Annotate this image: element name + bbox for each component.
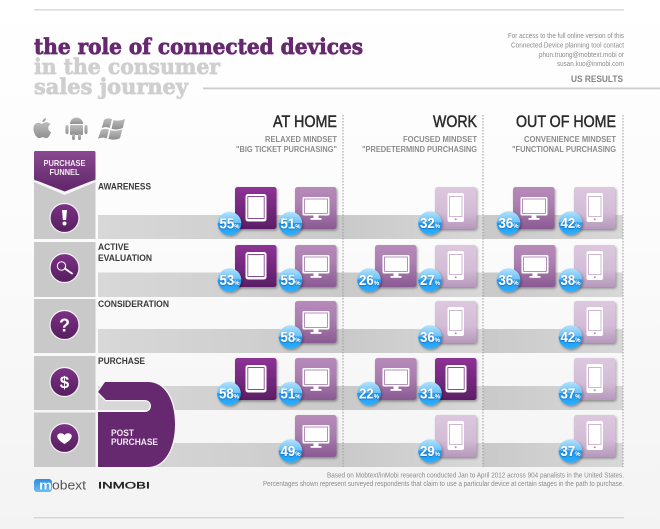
monitor work 26%: 26% bbox=[359, 273, 379, 289]
phone out of home 38% bbox=[559, 245, 616, 292]
monitor at home 58% bbox=[279, 301, 336, 349]
column header: work: FOCUSED MINDSET bbox=[403, 135, 477, 144]
funnel banner: FUNNEL bbox=[50, 167, 80, 177]
phone out of home 37%: 37% bbox=[560, 386, 581, 402]
footnote: Based on Mobtext/inMobi research conducted Jan to April 2012 across 904 panalists in the United States. bbox=[327, 472, 624, 480]
row: awareness bbox=[218, 187, 615, 235]
panel: funnel stage backgrounds bbox=[34, 180, 96, 467]
row: consideration bbox=[279, 301, 616, 349]
stage label: awareness: AWARENESS bbox=[98, 182, 151, 192]
monitor at home 49% bbox=[279, 415, 336, 463]
phone work 32% bbox=[418, 187, 476, 235]
stage label: consideration: CONSIDERATION bbox=[98, 299, 169, 310]
tablet work 31% bbox=[418, 358, 476, 405]
phone work 36%: 36% bbox=[420, 330, 440, 346]
title: the role of connected devices bbox=[34, 35, 363, 60]
monitor out of home 36%: 36% bbox=[498, 216, 519, 232]
contact text: susan.kuo@inmobi.com bbox=[557, 61, 624, 68]
icon: consideration question bbox=[50, 310, 79, 340]
phone work 36% bbox=[418, 301, 476, 349]
icon: apple bbox=[33, 118, 51, 138]
phone out of home 42% bbox=[559, 301, 616, 349]
footnote bbox=[263, 472, 624, 488]
icon: windows bbox=[98, 118, 125, 140]
icon: awareness exclamation bbox=[50, 204, 79, 232]
phone out of home 42% bbox=[559, 187, 616, 235]
post purchase arrow: POST bbox=[111, 428, 134, 439]
column header: out of home bbox=[512, 112, 616, 154]
contact text: For access to the full online version of this bbox=[508, 33, 624, 40]
logo: mobext bbox=[34, 478, 86, 492]
phone out of home 37% bbox=[559, 358, 616, 405]
header rule bbox=[203, 88, 660, 89]
column header: out of home: "FUNCTIONAL PURCHASING bbox=[512, 145, 616, 154]
monitor at home 55%: 55% bbox=[280, 273, 301, 289]
contact text: Connected Device planning tool contact bbox=[511, 42, 624, 50]
column header: work bbox=[362, 112, 478, 154]
tablet at home 53%: 53% bbox=[220, 273, 240, 289]
icon: purchase dollar: $ bbox=[60, 373, 70, 392]
phone out of home 37%: 37% bbox=[560, 444, 581, 460]
tablet at home 58%: 58% bbox=[219, 386, 239, 402]
funnel column bbox=[34, 151, 96, 467]
tablet at home 53% bbox=[218, 245, 276, 292]
column header: at home: "BIG TICKET PURCHASING" bbox=[236, 145, 337, 154]
monitor out of home 36% bbox=[497, 245, 556, 292]
stage label: active evaluation: ACTIVE bbox=[98, 242, 129, 253]
icon: purchase dollar bbox=[50, 368, 79, 396]
column header: work: "PREDETERMIND PURCHASING bbox=[362, 145, 477, 154]
phone out of home 42%: 42% bbox=[560, 330, 581, 346]
phone work 29% bbox=[418, 415, 476, 463]
post purchase arrow bbox=[98, 382, 175, 467]
phone work 27%: 27% bbox=[420, 273, 440, 289]
phone work 32%: 32% bbox=[420, 216, 440, 232]
bottom rule bbox=[34, 517, 624, 518]
icon: consideration question: ? bbox=[59, 316, 70, 336]
stage label: active evaluation: EVALUATION bbox=[98, 253, 152, 264]
monitor work 22%: 22% bbox=[359, 386, 379, 402]
row bands bbox=[98, 215, 623, 467]
column header: at home bbox=[236, 112, 337, 154]
contact text bbox=[508, 33, 625, 68]
column header: at home: AT HOME bbox=[273, 112, 337, 131]
monitor at home 51%: 51% bbox=[280, 216, 301, 232]
logo: mobext: obext bbox=[52, 478, 86, 492]
monitor out of home 36% bbox=[497, 187, 554, 235]
icon: evaluation magnifier bbox=[50, 254, 79, 282]
phone work 29%: 29% bbox=[420, 444, 440, 460]
row: purchase bbox=[217, 358, 615, 405]
monitor out of home 36%: 36% bbox=[498, 273, 519, 289]
stage label: purchase: PURCHASE bbox=[98, 356, 145, 367]
title: sales journey bbox=[34, 75, 188, 100]
monitor work 26% bbox=[357, 245, 416, 292]
footnote: Percentages shown represent surveyed respondents that claim to use a particular device at certain stages in the path to purchase. bbox=[263, 481, 624, 488]
column header: out of home: OUT OF HOME bbox=[516, 112, 616, 131]
logo: mobext: m bbox=[39, 478, 52, 492]
monitor at home 58%: 58% bbox=[280, 330, 301, 346]
monitor at home 51%: 51% bbox=[280, 386, 301, 402]
phone out of home 38%: 38% bbox=[560, 273, 581, 289]
icon: android bbox=[66, 118, 88, 140]
funnel banner: PURCHASE bbox=[44, 158, 86, 168]
icon: post purchase heart bbox=[50, 424, 79, 452]
phone out of home 37% bbox=[559, 415, 616, 463]
tablet at home 55%: 55% bbox=[220, 216, 240, 232]
tablet at home 58% bbox=[217, 358, 276, 405]
logo: inmobi: INMOBI bbox=[98, 480, 150, 492]
monitor at home 49%: 49% bbox=[280, 444, 301, 460]
contact text: phun.truong@mobtext.mobi or bbox=[539, 52, 625, 59]
tablet at home 55% bbox=[218, 187, 276, 235]
phone out of home 42%: 42% bbox=[560, 216, 581, 232]
column dividers bbox=[343, 115, 623, 467]
post purchase arrow: PURCHASE bbox=[111, 437, 158, 448]
top rule bbox=[34, 9, 624, 11]
column header: at home: RELAXED MINDSET bbox=[265, 135, 337, 144]
stage label: active evaluation bbox=[98, 242, 152, 264]
column header: out of home: CONVENIENCE MINDSET bbox=[524, 135, 616, 144]
title bbox=[34, 35, 363, 100]
monitor at home 51% bbox=[279, 358, 336, 405]
monitor at home 51% bbox=[279, 187, 336, 235]
monitor work 22% bbox=[357, 358, 416, 405]
column header: work: WORK bbox=[433, 112, 478, 131]
monitor at home 55% bbox=[279, 245, 336, 292]
US results label: US RESULTS bbox=[571, 74, 623, 84]
title: in the consumer bbox=[34, 55, 221, 80]
phone work 27% bbox=[418, 245, 476, 292]
funnel banner bbox=[34, 151, 96, 195]
row: active evaluation bbox=[218, 245, 615, 292]
row: post purchase bbox=[279, 415, 616, 463]
tablet work 31%: 31% bbox=[420, 386, 440, 402]
